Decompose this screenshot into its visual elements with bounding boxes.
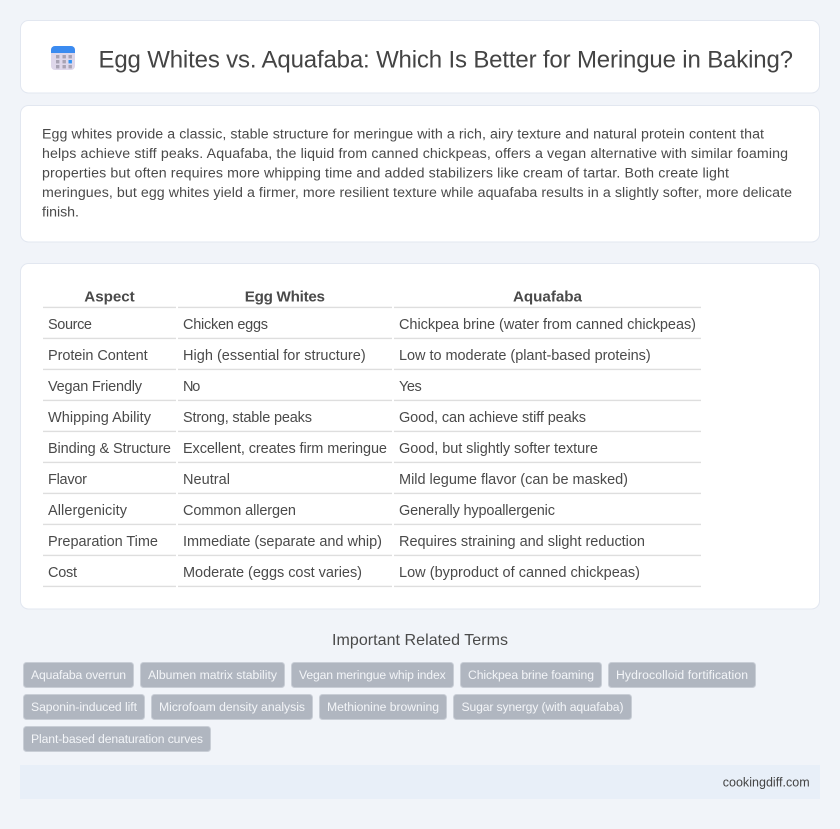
table header row: Aspect: [84, 289, 135, 306]
table row: source: Source: [48, 317, 92, 333]
icon: calendar grid: [51, 46, 75, 70]
tag: methionine browning: Methionine browning: [327, 700, 439, 714]
tag: saponin-induced lift: Saponin-induced lift: [31, 700, 138, 714]
table row: vegan friendly: No: [183, 379, 200, 395]
table row: cost: Low (byproduct of canned chickpeas): [399, 565, 640, 581]
table row: binding and structure: Good, but slightly softer texture: [399, 441, 598, 457]
heading: important related terms: Important Related Terms: [332, 632, 508, 649]
tag: methionine browning: [320, 694, 446, 720]
table row: protein content: Low to moderate (plant-based proteins): [399, 348, 651, 364]
table row: source: Chickpea brine (water from canned chickpeas): [399, 317, 696, 333]
footer: [20, 765, 820, 799]
tag list: related terms: [24, 662, 756, 752]
tag: albumen matrix stability: Albumen matrix stability: [148, 668, 278, 682]
panel: introduction text: [20, 106, 820, 242]
panel: header: [20, 20, 820, 93]
tag: chickpea brine foaming: [460, 662, 602, 688]
table row: allergenicity: Allergenicity: [48, 503, 128, 519]
table header row: [84, 289, 583, 306]
table row: protein content: High (essential for structure): [183, 348, 366, 364]
tag: vegan meringue whip index: Vegan meringue whip index: [299, 668, 446, 682]
tag: vegan meringue whip index: [292, 662, 454, 688]
paragraph: helps achieve stiff peaks. Aquafaba, the liquid from canned chickpeas, offers a vegan alternative with similar foaming: [42, 146, 788, 162]
table row: cost: [48, 565, 640, 581]
tag: microfoam density analysis: Microfoam density analysis: [159, 700, 305, 714]
footer source text: cookingdiff.com: [723, 776, 810, 790]
table row: binding and structure: [48, 441, 598, 457]
table header row: Aquafaba: [513, 289, 583, 306]
tag: sugar synergy: Sugar synergy (with aquafaba): [462, 700, 624, 714]
table row: preparation time: Preparation Time: [48, 534, 158, 550]
tag: albumen matrix stability: [140, 662, 284, 688]
tag: plant-based denaturation curves: Plant-based denaturation curves: [31, 732, 203, 746]
table header row: Egg Whites: [245, 289, 325, 306]
tag: hydrocolloid fortification: [608, 662, 756, 688]
table row: whipping ability: [48, 410, 586, 426]
paragraph: meringues, but egg whites yield a firmer, more resilient texture while aquafaba results in a slightly softer, more delicate: [42, 185, 792, 201]
table row: flavor: Neutral: [183, 472, 230, 488]
paragraph: [42, 126, 792, 220]
table row: whipping ability: Good, can achieve stiff peaks: [399, 410, 586, 426]
tag: aquafaba overrun: [24, 662, 134, 688]
table row: whipping ability: Strong, stable peaks: [183, 410, 312, 426]
table row: flavor: [48, 472, 628, 488]
table row: preparation time: [48, 534, 645, 550]
table row: source: Chicken eggs: [183, 317, 268, 333]
tag: sugar synergy: [454, 694, 632, 720]
table row: preparation time: Requires straining and slight reduction: [399, 534, 645, 550]
panel: comparison table: [20, 264, 820, 609]
table row: binding and structure: Binding & Structure: [48, 441, 171, 457]
table row: allergenicity: Common allergen: [183, 503, 296, 519]
title: Egg Whites vs. Aquafaba: Which Is Better for Meringue in Baking?: [98, 46, 793, 74]
table row: allergenicity: [48, 503, 555, 519]
table row: source: [48, 317, 696, 333]
tag: chickpea brine foaming: Chickpea brine foaming: [468, 668, 594, 682]
table row: flavor: Flavor: [48, 472, 87, 488]
table row: vegan friendly: Vegan Friendly: [48, 379, 143, 395]
table row: protein content: Protein Content: [48, 348, 148, 364]
table row: flavor: Mild legume flavor (can be masked): [399, 472, 628, 488]
tag: hydrocolloid fortification: Hydrocolloid fortification: [616, 668, 748, 682]
table row: preparation time: Immediate (separate and whip): [183, 534, 382, 550]
table row: protein content: [48, 348, 651, 364]
tag: plant-based denaturation curves: [24, 726, 210, 752]
paragraph: finish.: [42, 204, 79, 220]
tag: aquafaba overrun: Aquafaba overrun: [31, 668, 126, 682]
table row: binding and structure: Excellent, creates firm meringue: [183, 441, 387, 457]
paragraph: Egg whites provide a classic, stable structure for meringue with a rich, airy texture and natural protein content that: [42, 126, 764, 142]
paragraph: properties but often requires more whipping time and added stabilizers like cream of tartar. Both create light: [42, 166, 729, 182]
table row: allergenicity: Generally hypoallergenic: [399, 503, 555, 519]
table row: cost: Cost: [48, 565, 77, 581]
table row: cost: Moderate (eggs cost varies): [183, 565, 362, 581]
table row: vegan friendly: Yes: [399, 379, 422, 395]
table row: vegan friendly: [48, 379, 422, 395]
table row: whipping ability: Whipping Ability: [48, 410, 152, 426]
tag: microfoam density analysis: [152, 694, 312, 720]
tag: saponin-induced lift: [24, 694, 144, 720]
